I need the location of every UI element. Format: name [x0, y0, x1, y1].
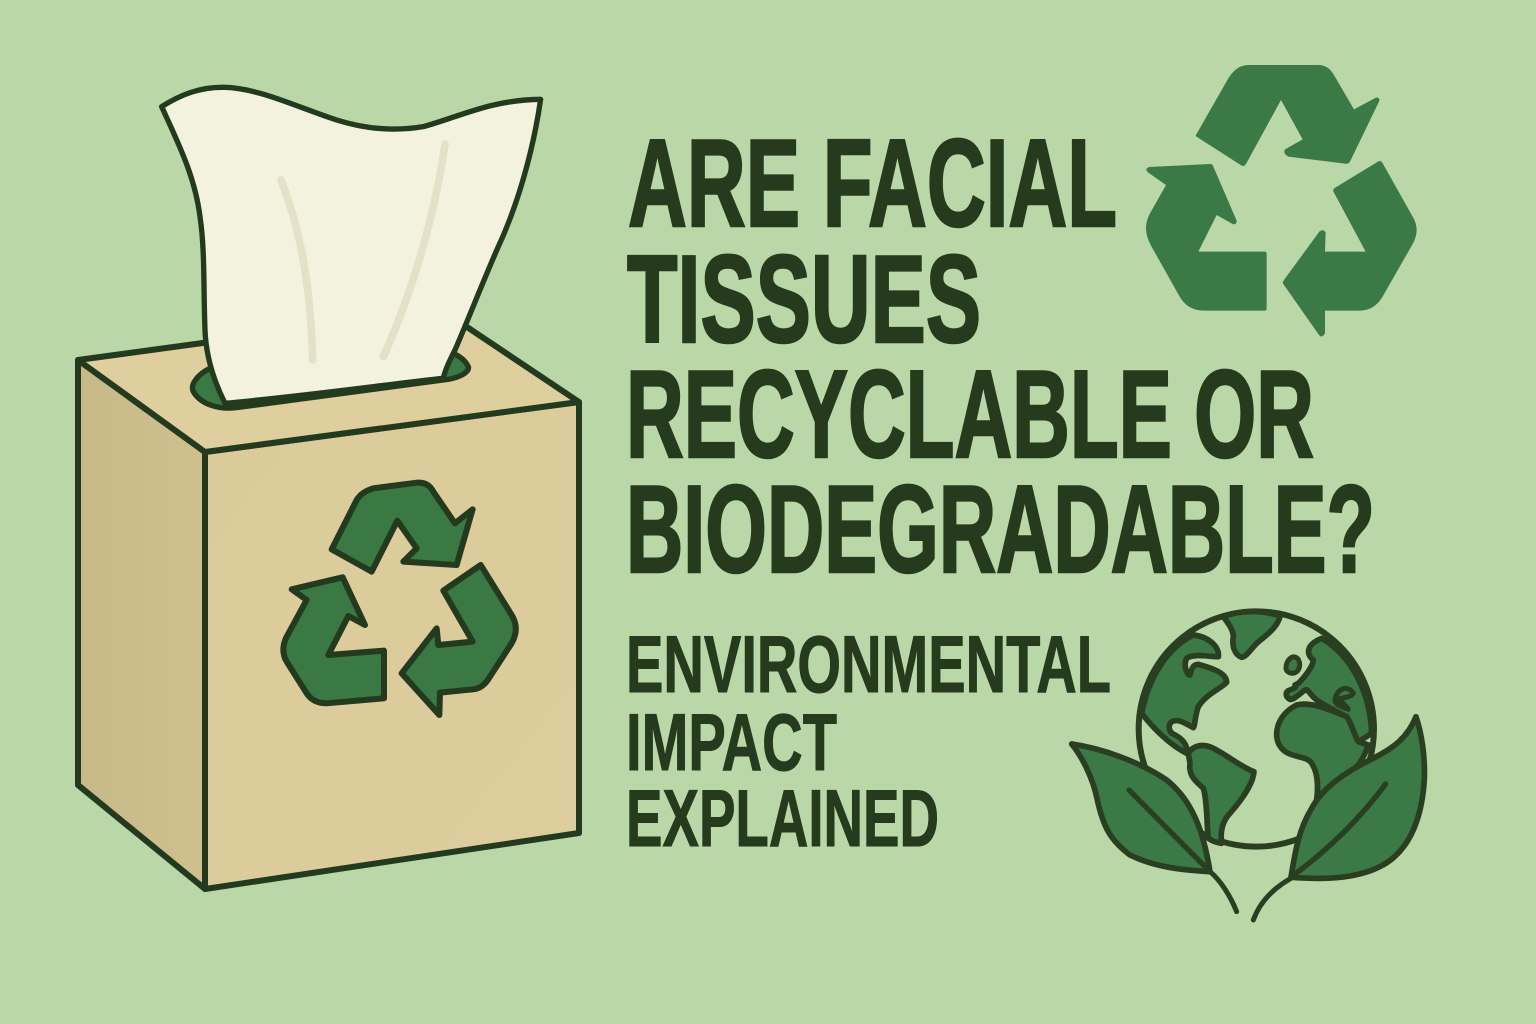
icon: recycling symbol on box — [283, 483, 516, 715]
title: ARE FACIAL — [628, 115, 1117, 253]
Britain — [1286, 657, 1300, 673]
left leaf — [1072, 744, 1210, 872]
icon: large recycling symbol — [1146, 65, 1417, 336]
box top face — [78, 327, 579, 452]
continent: North America — [1142, 635, 1227, 753]
tissue fold right — [383, 144, 445, 357]
subtitle: ENVIRONMENTAL — [626, 620, 1111, 710]
subtitle: IMPACT — [626, 698, 837, 788]
box left face — [78, 360, 205, 889]
subtitle — [626, 620, 1111, 864]
continent: Africa — [1277, 704, 1368, 800]
box front face — [205, 402, 579, 889]
tissue box illustration — [78, 87, 579, 889]
continent: Greenland — [1223, 612, 1280, 657]
left stem — [1210, 872, 1237, 912]
right leaf midrib — [1292, 784, 1386, 877]
Black Sea loop — [1335, 688, 1353, 709]
icon: globe with leaves — [1072, 611, 1424, 920]
subtitle: EXPLAINED — [626, 774, 939, 864]
tissue fold left — [281, 180, 313, 360]
right stem — [1253, 878, 1291, 920]
continent: South America — [1188, 746, 1254, 843]
left leaf midrib — [1129, 790, 1207, 868]
globe disc — [1139, 611, 1374, 847]
right leaf — [1291, 717, 1424, 878]
title: TISSUES — [627, 231, 981, 369]
title — [626, 115, 1375, 599]
tissue slot — [192, 353, 468, 408]
tissue sheet — [162, 87, 541, 403]
continent: Eurasia — [1286, 638, 1372, 742]
